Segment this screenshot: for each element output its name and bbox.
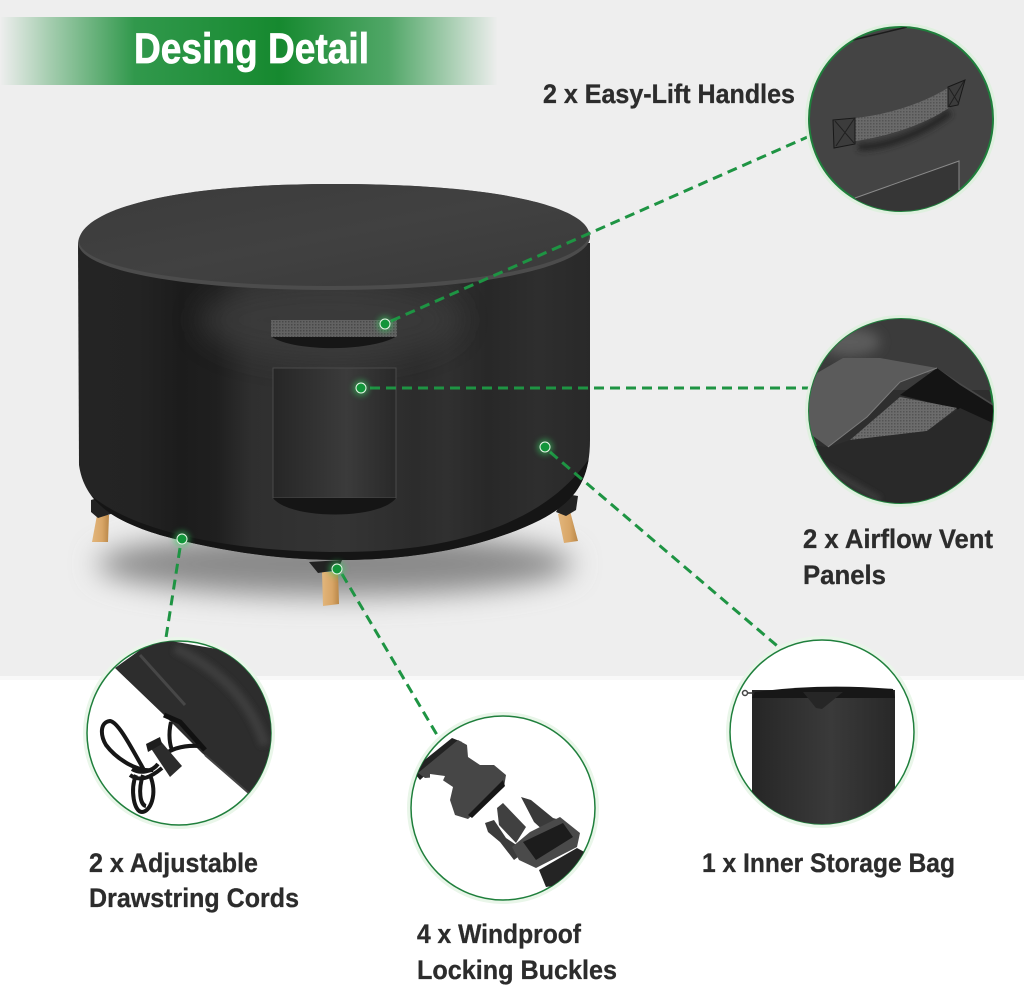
cover body <box>78 243 590 560</box>
callout dots <box>174 316 553 577</box>
background panel <box>0 0 1024 680</box>
label: easy-lift handles: 2 x Easy-Lift Handles <box>543 79 795 109</box>
panel: storage bag detail <box>726 636 918 835</box>
table legs <box>91 494 578 606</box>
panel: drawstring cords detail <box>83 637 290 829</box>
cover top <box>78 184 590 290</box>
label: drawstring cords: 2 x Adjustable <box>89 848 258 878</box>
label: locking buckles: Locking Buckles <box>417 955 617 985</box>
label: drawstring cords: Drawstring Cords <box>89 883 299 913</box>
callout lines <box>165 135 812 740</box>
panel: airflow vent detail <box>805 315 1000 510</box>
cord and toggle <box>102 721 200 812</box>
ground shadow <box>97 532 573 596</box>
handle <box>271 320 397 348</box>
body shading and hem <box>70 280 600 600</box>
title: Desing Detail <box>134 25 369 73</box>
panel: easy-lift handle detail <box>805 23 997 215</box>
label: airflow vent panels: 2 x Airflow Vent <box>803 524 993 554</box>
label: locking buckles: 4 x Windproof <box>417 919 582 949</box>
vent pocket <box>273 368 396 514</box>
panel: locking buckle detail <box>407 712 599 904</box>
table cover product <box>70 184 600 606</box>
label: storage bag: 1 x Inner Storage Bag <box>702 848 955 878</box>
label: airflow vent panels: Panels <box>803 560 886 590</box>
title banner <box>0 17 498 85</box>
